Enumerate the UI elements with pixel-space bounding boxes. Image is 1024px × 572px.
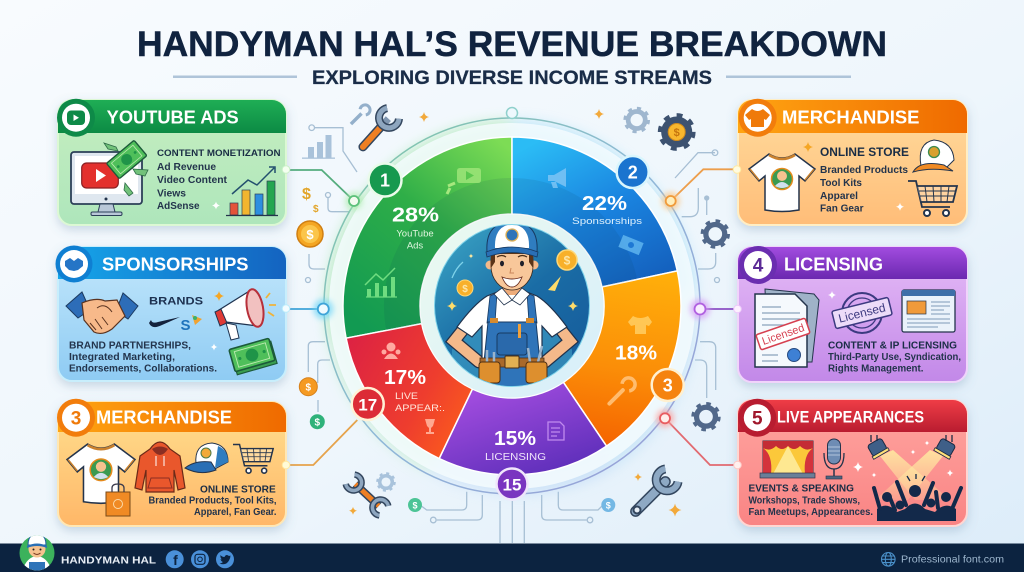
connector node bbox=[734, 305, 741, 313]
node: green bbox=[345, 192, 363, 210]
text: list bbox=[820, 164, 908, 215]
text: list: Branded Products bbox=[820, 164, 908, 176]
text: description: Third-Party Use, Syndication, bbox=[828, 352, 961, 363]
icon: bottom left wrench bbox=[345, 473, 389, 517]
label: 17%: 17% bbox=[384, 367, 426, 389]
badge: 5: 5 bbox=[752, 408, 763, 430]
icon: blue coin bottom: $ bbox=[606, 500, 611, 510]
icon: orange coin: $ bbox=[306, 382, 312, 394]
label: youtube ads: YouTube bbox=[396, 229, 434, 240]
connector node bbox=[733, 166, 741, 173]
chart glow bbox=[327, 122, 697, 494]
icon: shirt bbox=[628, 316, 652, 334]
label: live appearances: APPEAR:. bbox=[395, 403, 445, 414]
text: description: Apparel, Fan Gear. bbox=[194, 507, 277, 518]
badge: handshake bbox=[56, 246, 92, 282]
segment: merchandise 18% bbox=[563, 271, 681, 446]
label: sponsorships: Sponsorships bbox=[572, 216, 642, 227]
icon: t-shirt bbox=[67, 444, 135, 503]
connector: live appearances bbox=[665, 418, 737, 465]
icon: lower right gear bbox=[693, 404, 719, 429]
title: HANDYMAN HAL’S REVENUE BREAKDOWN bbox=[137, 25, 887, 64]
icon: spotlights bbox=[866, 435, 957, 500]
text: description: Branded Products, Tool Kits, bbox=[148, 495, 277, 506]
icon: licensed stamp bbox=[832, 293, 892, 333]
segment: youtube ads 28% bbox=[343, 137, 512, 338]
badge: shirt bbox=[739, 99, 777, 137]
icon: sparkle bbox=[828, 291, 836, 299]
overalls bbox=[487, 293, 537, 323]
icons: small stars bbox=[349, 473, 682, 516]
node: blue bbox=[313, 299, 333, 319]
icon: orange star top right bbox=[594, 109, 604, 119]
portrait disk bbox=[434, 224, 590, 387]
icon: dollar signs bbox=[302, 186, 319, 215]
icon: microphone bbox=[824, 439, 844, 479]
number badges bbox=[352, 156, 684, 500]
text: list: Apparel bbox=[820, 190, 858, 202]
icon: globe bbox=[882, 552, 895, 566]
icon: play bbox=[447, 168, 481, 194]
label: 28%: 28% bbox=[392, 205, 439, 227]
text: content monetization: CONTENT MONETIZATION bbox=[157, 148, 281, 159]
icon: licensed document bbox=[755, 289, 819, 367]
center portrait bbox=[420, 214, 604, 398]
connector: youtube ads bbox=[287, 170, 354, 201]
panel: merchandise right bbox=[733, 99, 967, 225]
portrait ring bbox=[420, 214, 604, 398]
logos bbox=[149, 315, 202, 334]
icon: shopping bag bbox=[106, 484, 130, 516]
footer avatar bbox=[20, 534, 54, 572]
panel header bbox=[738, 400, 967, 432]
icon: blue coin bottom bbox=[601, 498, 615, 512]
forearms bbox=[454, 331, 570, 362]
connector node bbox=[282, 305, 290, 312]
icon: wrench in segment bbox=[605, 375, 638, 408]
text: list: Views bbox=[157, 188, 186, 200]
icon: hoodie bbox=[135, 442, 185, 492]
badge: 2 bbox=[617, 156, 649, 188]
logos: S bbox=[180, 317, 191, 334]
text: description bbox=[148, 495, 277, 518]
panel header bbox=[738, 100, 967, 133]
cap bbox=[487, 222, 537, 252]
text: online store: ONLINE STORE bbox=[820, 145, 909, 159]
badge: 17: 17 bbox=[358, 396, 377, 414]
icon: licensed document: Licensed bbox=[761, 322, 806, 348]
icon: shopping cart bbox=[908, 181, 957, 216]
icon: money bbox=[618, 235, 644, 255]
label: 22%: 22% bbox=[582, 193, 627, 215]
icon: orange star top bbox=[419, 112, 429, 122]
segment: sponsorships 22% bbox=[512, 137, 677, 287]
connector: licensing bbox=[700, 308, 737, 310]
panel header bbox=[58, 100, 286, 133]
icons: sparkles bbox=[803, 142, 904, 211]
icon: orange cap bbox=[913, 140, 954, 172]
heading: MERCHANDISE bbox=[96, 407, 232, 427]
connector node bbox=[282, 166, 290, 173]
icon: growth chart bbox=[226, 167, 278, 216]
label: youtube ads: Ads bbox=[407, 240, 423, 252]
icon: right gear bbox=[703, 221, 728, 247]
icon: sparkles bbox=[210, 291, 224, 350]
heading: LICENSING bbox=[784, 255, 883, 275]
badge: 4 bbox=[739, 246, 777, 284]
tool belt bbox=[480, 358, 544, 367]
text: description: BRAND PARTNERSHIPS, bbox=[69, 340, 191, 351]
icon: sparkle bbox=[212, 202, 220, 210]
mascot: handyman hal bbox=[452, 222, 572, 390]
text: description: Workshops, Trade Shows, bbox=[748, 495, 860, 506]
label: live appearances: LIVE bbox=[395, 391, 418, 402]
icon: orange wrench bbox=[356, 107, 400, 154]
icon: twitter bbox=[216, 550, 234, 568]
label: youtube ads bbox=[396, 229, 434, 252]
text: description: EVENTS & SPEAKING bbox=[748, 483, 854, 495]
text: brands: BRANDS bbox=[149, 295, 203, 307]
badge: 2: 2 bbox=[628, 162, 638, 182]
label: 18%: 18% bbox=[615, 342, 657, 364]
icon: megaphone bbox=[215, 288, 276, 340]
shirt bbox=[457, 291, 567, 360]
text: description: Fan Meetups, Appearances. bbox=[748, 507, 873, 518]
icon: licensed stamp: Licensed bbox=[837, 300, 887, 326]
icon: gold coin bbox=[297, 221, 323, 247]
text: list: Video Content bbox=[157, 174, 227, 186]
subtitle: EXPLORING DIVERSE INCOME STREAMS bbox=[312, 68, 712, 89]
icon: facebook bbox=[166, 550, 184, 568]
badge: 3: 3 bbox=[71, 408, 81, 430]
coins and sparkles: $ bbox=[462, 284, 468, 295]
icon: gear with coin bbox=[660, 116, 693, 148]
icon: instagram bbox=[191, 550, 209, 568]
node: purple bbox=[690, 299, 710, 319]
icon: handshake bbox=[66, 292, 138, 333]
badge: 3 bbox=[57, 399, 95, 437]
text: online store: ONLINE STORE bbox=[200, 483, 276, 495]
icon: t-shirt bbox=[749, 154, 815, 212]
inner shade band bbox=[402, 196, 620, 327]
icon: people bbox=[382, 342, 400, 359]
icon: small wrench bbox=[347, 103, 372, 128]
node: orange bbox=[662, 192, 680, 210]
icon: green coin bbox=[310, 414, 325, 429]
chart icons bbox=[365, 168, 652, 440]
outer ring bbox=[324, 118, 700, 494]
label: live appearances bbox=[395, 391, 445, 414]
connector node bbox=[734, 461, 741, 469]
label: 15%: 15% bbox=[494, 428, 536, 450]
icon: browser window bbox=[902, 290, 955, 332]
text: list: AdSense bbox=[157, 200, 200, 212]
text: description bbox=[748, 483, 873, 518]
footer website: Professional font.com bbox=[901, 554, 1004, 566]
icon: light gear bbox=[625, 109, 648, 131]
badge: 3: 3 bbox=[663, 376, 673, 396]
label: licensing: LICENSING bbox=[485, 452, 546, 463]
icon: monitor with money bbox=[71, 140, 148, 216]
connector: merchandise left bbox=[287, 420, 357, 465]
icon: gear with coin: $ bbox=[674, 127, 680, 139]
segment: licensing 15% bbox=[439, 382, 606, 475]
heading: SPONSORSHIPS bbox=[102, 255, 248, 275]
text: description: Endorsements, Collaborations. bbox=[69, 364, 217, 375]
text: description: Integrated Marketing, bbox=[69, 352, 175, 363]
badge: 17 bbox=[352, 388, 384, 420]
text: list: Tool Kits bbox=[820, 177, 862, 189]
panel: live appearances bbox=[734, 399, 967, 526]
heading: MERCHANDISE bbox=[782, 107, 920, 127]
coins and sparkles bbox=[447, 250, 578, 311]
icon: gold coin: $ bbox=[306, 227, 314, 242]
badge: 1: 1 bbox=[380, 170, 390, 190]
text: list bbox=[157, 161, 227, 212]
icon: stage bbox=[760, 441, 815, 478]
text: description bbox=[828, 340, 961, 375]
coins and sparkles: $ bbox=[564, 254, 571, 268]
text: description bbox=[69, 340, 217, 375]
icon: shopping cart bbox=[233, 444, 273, 473]
icon: bar chart decoration bbox=[302, 135, 335, 159]
heading: LIVE APPEARANCES bbox=[777, 409, 924, 427]
text: description: Rights Management. bbox=[828, 364, 924, 375]
icon: facebook: f bbox=[173, 552, 178, 568]
node: red bbox=[656, 409, 674, 427]
node: top bbox=[506, 108, 518, 118]
panel: licensing bbox=[734, 246, 967, 382]
icon: bottom right wrench bbox=[627, 468, 679, 520]
badge: 3 bbox=[652, 369, 684, 401]
icons: sparkles bbox=[853, 440, 954, 478]
icon: document bbox=[548, 422, 564, 440]
footer bbox=[0, 534, 1024, 572]
panel: sponsorships bbox=[56, 246, 290, 381]
chart labels bbox=[384, 193, 657, 463]
icon: green coin: $ bbox=[315, 418, 321, 428]
donut chart bbox=[343, 137, 681, 475]
text: description: CONTENT & IP LICENSING bbox=[828, 340, 957, 351]
heading: YOUTUBE ADS bbox=[107, 107, 239, 127]
panel header bbox=[58, 402, 286, 432]
icon: green coin bottom: $ bbox=[412, 500, 418, 510]
ring nodes bbox=[313, 108, 710, 427]
icon: dollar signs: $ bbox=[302, 186, 311, 203]
icon: orange coin bbox=[299, 378, 317, 396]
icon: megaphone bbox=[548, 168, 566, 188]
icon: crowd bbox=[874, 474, 961, 521]
circuit decorations bbox=[306, 125, 720, 543]
icon: blue cap bbox=[185, 443, 228, 473]
panel header bbox=[58, 247, 286, 279]
icon: dollar signs: $ bbox=[313, 204, 319, 215]
connector: sponsorships bbox=[287, 308, 323, 310]
icon: growth chart bbox=[365, 268, 397, 297]
badge: 15 bbox=[496, 468, 528, 500]
badge: 4: 4 bbox=[753, 256, 764, 276]
head bbox=[503, 288, 521, 295]
text: list: Fan Gear bbox=[820, 203, 864, 215]
panel: youtube ads bbox=[57, 99, 290, 225]
text: list: Ad Revenue bbox=[157, 161, 216, 173]
segment: live appearances 17% bbox=[346, 324, 472, 458]
badge: 15: 15 bbox=[503, 476, 521, 494]
badge: 5 bbox=[738, 399, 776, 437]
icon: trophy bbox=[425, 419, 435, 434]
icon: bottom left gear bbox=[378, 474, 394, 490]
panel header bbox=[738, 247, 967, 279]
badge: play bbox=[57, 99, 95, 137]
footer brand name: HANDYMAN HAL bbox=[61, 554, 157, 566]
connector node bbox=[282, 461, 290, 469]
panel: merchandise left bbox=[57, 399, 290, 526]
connector: merchandise right bbox=[671, 169, 737, 201]
icon: green coin bottom bbox=[408, 498, 422, 512]
icon: money bbox=[229, 338, 277, 375]
badge: 1 bbox=[368, 164, 402, 196]
